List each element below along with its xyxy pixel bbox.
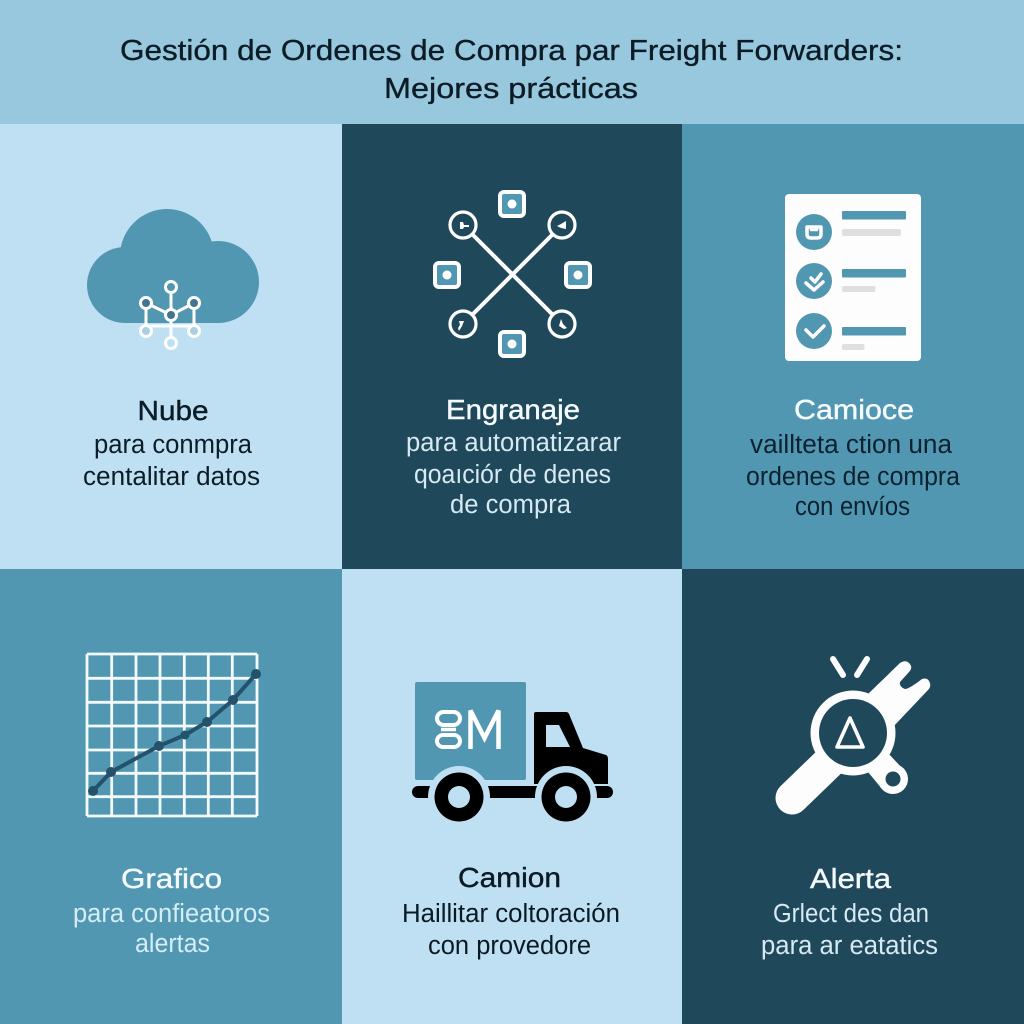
heading: Camioce: Camioce xyxy=(794,394,914,425)
text: camion description: con provedore xyxy=(428,932,591,960)
heading: Nube: Nube xyxy=(138,395,208,426)
title: Gestión de Ordenes de Compra par Freight Forwarders: xyxy=(120,35,903,67)
text: engranaje description: de compra xyxy=(450,491,572,519)
icon: cloud network xyxy=(87,209,259,348)
text: camioce description: ordenes de compra xyxy=(746,463,961,491)
text: nube description: para conmpra xyxy=(94,431,253,459)
text: camioce description: vaillteta ction una xyxy=(750,431,953,459)
text: grafico description xyxy=(73,900,270,958)
text: grafico description: para confieatoros xyxy=(73,900,270,928)
heading: Alerta: Alerta xyxy=(810,863,891,894)
icon: truck xyxy=(412,682,613,828)
panel: engranaje xyxy=(342,124,682,569)
text: camioce description xyxy=(746,431,961,521)
icon: magnifier wrench alert xyxy=(792,659,930,798)
text: grafico description: alertas xyxy=(135,930,210,958)
text: camion description xyxy=(402,900,620,960)
panel: camioce xyxy=(682,124,1024,569)
icon: line chart on grid xyxy=(87,654,261,816)
heading: Camion: Camion xyxy=(458,862,561,893)
text: alerta description: para ar eatatics xyxy=(761,932,938,960)
header band xyxy=(0,0,1024,124)
panel: camion xyxy=(342,569,682,1024)
heading: Grafico: Grafico xyxy=(121,863,222,894)
title: Mejores prácticas xyxy=(384,73,638,105)
panel: grafico xyxy=(0,569,342,1024)
text: alerta description: Grlect des dan xyxy=(773,900,929,928)
text: alerta description xyxy=(761,900,938,960)
text: engranaje description xyxy=(406,429,622,519)
panel: nube xyxy=(0,124,342,569)
icon: cross network xyxy=(435,192,590,356)
heading: Engranaje: Engranaje xyxy=(446,394,580,425)
text: nube description xyxy=(83,431,260,491)
text: camion description: Haillitar coltoración xyxy=(402,900,620,928)
panel: alerta xyxy=(682,569,1024,1024)
text: camioce description: con envíos xyxy=(795,493,910,521)
text: engranaje description: para automatizarar xyxy=(406,429,622,457)
icon: checklist card xyxy=(785,194,921,361)
text: nube description: centalitar datos xyxy=(83,463,260,491)
text: engranaje description: qoaıciór de denes xyxy=(414,461,611,489)
title xyxy=(120,35,903,105)
